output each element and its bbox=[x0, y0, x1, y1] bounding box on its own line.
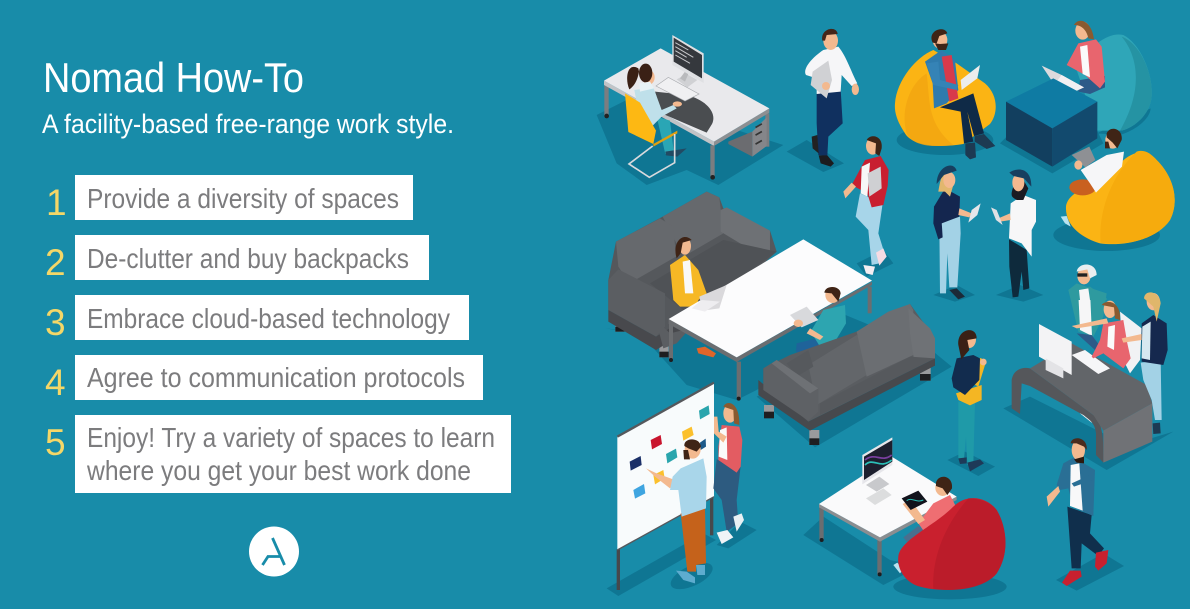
list item 5: Enjoy! Try a variety of spaces to learn bbox=[87, 422, 495, 453]
list item 4: 4 bbox=[45, 362, 66, 403]
list item 1 bbox=[46, 175, 413, 223]
man in teal shirt at table bbox=[790, 287, 846, 355]
list item 1: 1 bbox=[46, 182, 67, 223]
man on phone walking bbox=[1047, 438, 1124, 591]
red beanbag man with tablet bbox=[893, 477, 1007, 599]
beanbag man with tablet bbox=[895, 29, 996, 159]
subtitle: A facility-based free-range work style. bbox=[42, 109, 454, 139]
right grey sofa bbox=[757, 304, 952, 447]
whiteboard with coloured sticky notes bbox=[607, 383, 716, 596]
man in white shirt walking with folder bbox=[787, 29, 859, 172]
grey arched reception desk bbox=[1003, 324, 1173, 470]
list item 5 bbox=[45, 415, 511, 493]
man with hat at reception desk, head bbox=[1073, 265, 1107, 300]
person with yellow shirt and backpack bbox=[947, 330, 995, 476]
list item 1: Provide a diversity of spaces bbox=[87, 183, 399, 214]
list item 4: Agree to communication protocols bbox=[87, 362, 465, 393]
standing woman with tablet, white top bbox=[991, 170, 1043, 302]
white meeting table with laptop bbox=[669, 239, 872, 401]
coworkers at reception desk bbox=[1068, 283, 1168, 434]
logo: A in white circle bbox=[249, 526, 299, 576]
list item 3 bbox=[45, 295, 469, 343]
woman in red jacket with folder bbox=[843, 136, 893, 277]
left grey sofa bbox=[605, 192, 890, 400]
list item 4 bbox=[45, 355, 483, 403]
illustration: isometric office scene bbox=[597, 21, 1175, 599]
blue cube table bbox=[1000, 78, 1103, 173]
list item 3: 3 bbox=[45, 302, 66, 343]
list item 3: Embrace cloud-based technology bbox=[87, 303, 450, 334]
small white desk with computer bbox=[803, 437, 957, 585]
list item 2: 2 bbox=[45, 242, 66, 283]
woman in coral jacket at whiteboard bbox=[713, 403, 757, 548]
title: Nomad How-To bbox=[43, 54, 304, 101]
teal beanbag woman with laptop bbox=[1042, 21, 1152, 135]
desk workstation with seated woman bbox=[597, 35, 783, 185]
list item 5: where you get your best work done bbox=[86, 455, 471, 486]
yellow beanbag man with white shirt bbox=[1053, 129, 1175, 251]
standing woman with tablet, navy top bbox=[933, 166, 981, 302]
list item 2 bbox=[45, 235, 429, 283]
list item 2: De-clutter and buy backpacks bbox=[87, 243, 409, 274]
woman in yellow jacket on sofa bbox=[670, 237, 716, 357]
man in light blue shirt pointing at whiteboard bbox=[646, 439, 716, 595]
list item 5: 5 bbox=[45, 422, 66, 463]
